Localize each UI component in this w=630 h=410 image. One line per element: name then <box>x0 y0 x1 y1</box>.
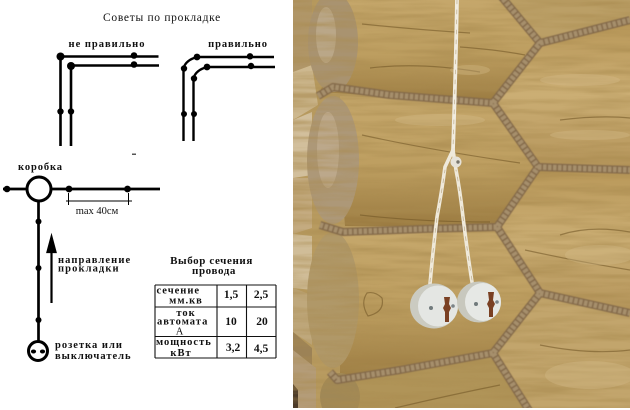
title: Советы по прокладке <box>103 12 221 24</box>
dimension: max spacing: max 40см <box>76 206 119 217</box>
diagram: correct wiring <box>181 39 275 141</box>
wood grain texture <box>293 0 630 408</box>
diagram: junction box routing <box>3 162 160 362</box>
rope between logs <box>318 0 630 410</box>
dimension: max spacing <box>66 193 132 217</box>
table: wire cross-section: ток <box>176 308 196 319</box>
label: socket or switch: розетка или <box>55 340 123 351</box>
table: wire cross-section: сечение <box>156 286 200 296</box>
table: wire cross-section: 2,5 <box>254 289 268 301</box>
arrow: laying direction <box>48 237 56 303</box>
twisted wire <box>430 0 472 284</box>
right logs <box>499 52 630 408</box>
label: incorrect: не правильно <box>69 39 145 50</box>
label: junction box: коробка <box>18 162 63 173</box>
table: wire cross-section: 20 <box>256 316 268 328</box>
table: wire cross-section: 1,5 <box>224 289 238 301</box>
table: wire cross-section: 10 <box>225 316 237 328</box>
log end grain <box>307 0 360 410</box>
table: wire cross-section: кВт <box>170 348 192 359</box>
table: wire cross-section: 3,2 <box>226 342 240 354</box>
label: laying direction: прокладки <box>58 264 120 274</box>
switch: right <box>457 282 501 322</box>
diagram: incorrect wiring <box>56 39 159 146</box>
table heading: Выбор сечения <box>170 255 253 267</box>
photo: log wall with rope and switches <box>293 0 630 410</box>
junction box circle <box>27 177 51 201</box>
light wood bands <box>395 65 630 389</box>
table: wire cross-section: 4,5 <box>254 343 268 355</box>
table: wire cross-section: мм.кв <box>169 296 203 306</box>
label: laying direction: направление <box>58 255 131 266</box>
table: wire cross-section: автомата <box>157 316 208 328</box>
table: wire cross-section <box>155 285 276 359</box>
label: socket or switch: выключатель <box>55 351 132 362</box>
switch: left <box>410 284 458 328</box>
long logs <box>321 0 526 374</box>
far-left log edges <box>293 66 318 408</box>
table: wire cross-section: А <box>176 326 184 338</box>
label: correct: правильно <box>208 39 268 50</box>
table: wire cross-section: мощность <box>156 337 212 348</box>
table heading: провода <box>192 265 236 277</box>
icon: socket <box>28 342 48 360</box>
dark grain lines <box>360 24 630 408</box>
wire clip <box>450 156 462 168</box>
